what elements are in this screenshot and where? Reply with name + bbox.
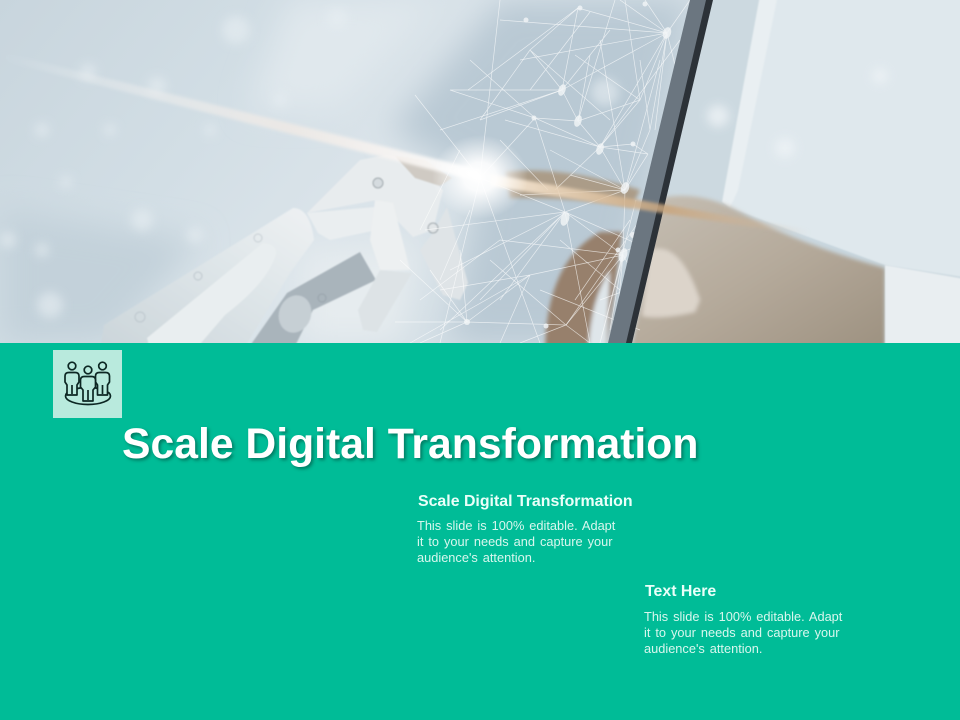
light streak and flare <box>0 52 810 236</box>
robot hand <box>100 155 468 350</box>
right window panels <box>630 0 960 343</box>
body text <box>417 518 616 565</box>
tablet edge <box>608 0 713 343</box>
wrist <box>307 207 377 240</box>
fingers <box>370 200 410 270</box>
back arm segment <box>247 252 376 350</box>
bokeh dots <box>0 8 619 318</box>
body text: audience's attention. <box>644 641 762 656</box>
body text: This slide is 100% editable. Adapt <box>644 609 842 624</box>
body text: audience's attention. <box>417 550 535 565</box>
hero photo: robot hand and human hand touching a tablet <box>0 0 960 343</box>
network nodes <box>464 2 673 328</box>
icon tile: group of people <box>53 350 122 418</box>
forearm <box>100 208 314 350</box>
body text: This slide is 100% editable. Adapt <box>417 518 615 533</box>
body text: it to your needs and capture your <box>417 534 612 549</box>
blurred background shapes <box>0 0 690 343</box>
body text: it to your needs and capture your <box>644 625 840 640</box>
body text <box>644 609 842 656</box>
text block: Text Here <box>644 583 842 656</box>
subheading: Text Here <box>645 583 716 600</box>
human hand <box>505 170 960 355</box>
title: Scale Digital Transformation <box>122 420 698 468</box>
icon: three people on a round base <box>64 361 112 406</box>
text block: Scale Digital Transformation <box>417 493 633 565</box>
back of hand <box>307 155 443 237</box>
network mesh on tablet <box>395 0 690 343</box>
subheading: Scale Digital Transformation <box>418 493 633 510</box>
